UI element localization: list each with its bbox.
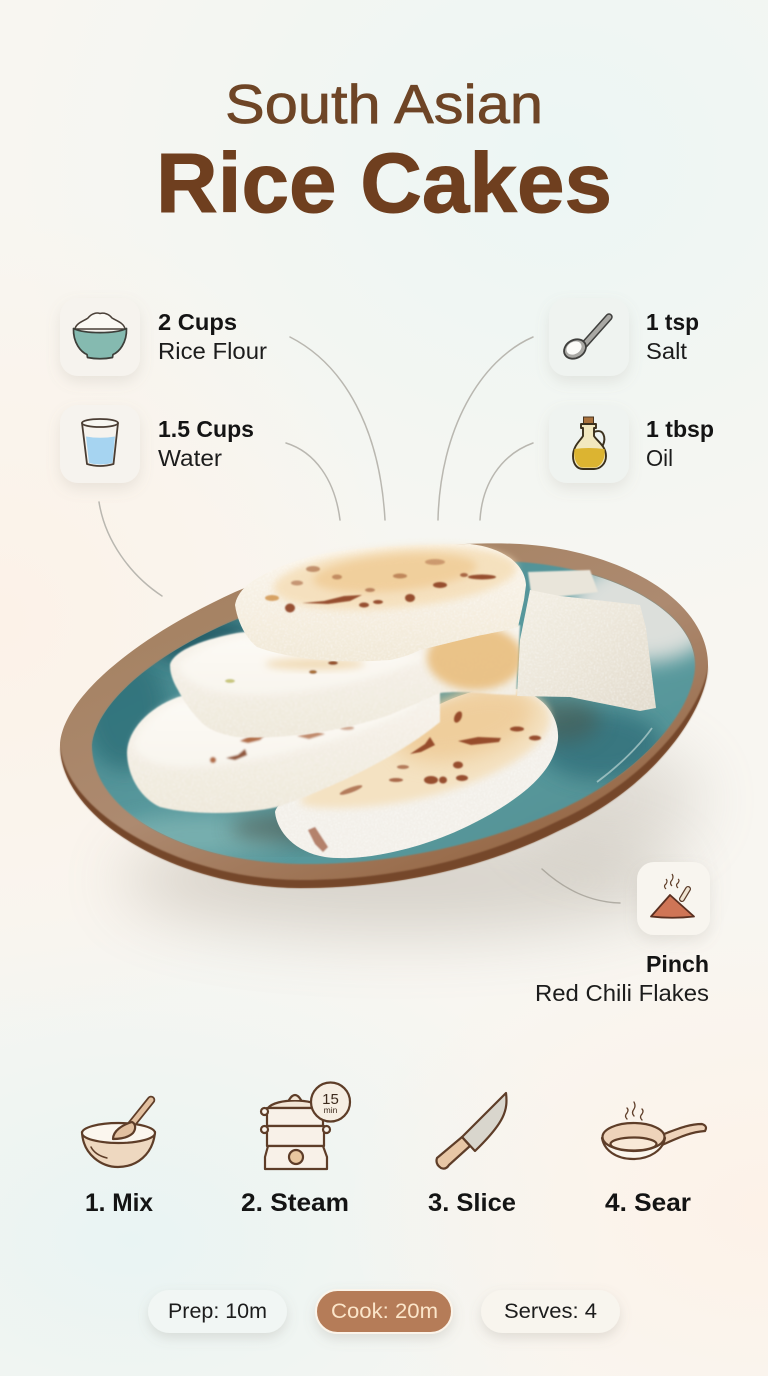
label: pinch red chili flakes: Pinch [646,951,709,977]
plate shadow [120,745,700,935]
step 2: steam [241,1082,350,1217]
title [156,73,612,230]
icon: knife [436,1093,506,1169]
rice cake: front right [275,674,558,858]
label: 2 cups rice flour: 2 Cups [158,309,237,335]
pill: prep: Prep: 10m [168,1300,267,1323]
rice cake: lower left [127,683,440,813]
icon card: rice flour [60,298,140,376]
icon: frying pan [602,1102,706,1159]
ingredient: water [60,405,254,483]
icon: spoon of salt [561,317,609,363]
label: 2 cups rice flour: Rice Flour [158,338,267,364]
ingredient: red chili flakes [535,862,710,1006]
label: 1 tbsp oil: Oil [646,445,673,471]
title: South Asian [225,73,543,135]
connector lines [99,337,620,903]
icon: mixing bowl [82,1100,155,1167]
pill: cook: Cook: 20m [331,1300,438,1323]
ingredient: salt [549,298,699,376]
label: 3. slice: 3. Slice [428,1189,516,1217]
pill: serves: Serves: 4 [504,1300,597,1323]
badge: 15 min [311,1082,350,1122]
icon: oil bottle [573,417,606,469]
step 4: sear [602,1102,706,1217]
label: 1.5 cups water: 1.5 Cups [158,416,254,442]
icon: chili powder pile [651,874,694,918]
badge: 15 min: 15 [322,1091,339,1108]
photo: plate of rice cakes [60,537,720,888]
step 1: mix [82,1100,155,1217]
rice cake: top [235,537,526,661]
chili specks: top cake [265,559,496,612]
label: 4. sear: 4. Sear [605,1189,691,1217]
rice cake: back piece [528,570,598,600]
rice cake: middle [170,625,523,738]
label: 1 tsp salt [646,309,699,364]
plate [60,543,720,888]
pill: cook [316,1290,452,1333]
icon card: water [60,405,140,483]
icon: glass of water [82,419,118,466]
chili specks: front cake [308,710,541,852]
icon: bowl of flour [73,313,127,359]
badge: 15 min: min [324,1105,338,1115]
step 3: slice [428,1093,516,1217]
label: pinch red chili flakes [535,951,709,1006]
label: 1.5 cups water [158,416,254,471]
label: 1.5 cups water: Water [158,445,222,471]
icon card: chili flakes [637,862,710,935]
chili specks: lower left cake [210,726,354,763]
pill: serves [481,1290,620,1333]
label: 1 tsp salt: Salt [646,338,688,364]
ingredient: rice flour [60,298,267,376]
icon card: oil [549,405,629,483]
label: 1. mix: 1. Mix [85,1189,153,1217]
label: 2. steam: 2. Steam [241,1189,349,1217]
label: pinch red chili flakes: Red Chili Flakes [535,980,709,1006]
pill: prep [148,1290,287,1333]
label: 1 tbsp oil [646,416,714,471]
title: Rice Cakes [156,136,612,230]
label: 1 tsp salt: 1 tsp [646,309,699,335]
label: 1 tbsp oil: 1 tbsp [646,416,714,442]
label: 2 cups rice flour [158,309,267,364]
ingredient: oil [549,405,714,483]
icon card: salt [549,298,629,376]
rice cake: square piece [517,590,656,711]
icon: steamer [261,1095,330,1169]
